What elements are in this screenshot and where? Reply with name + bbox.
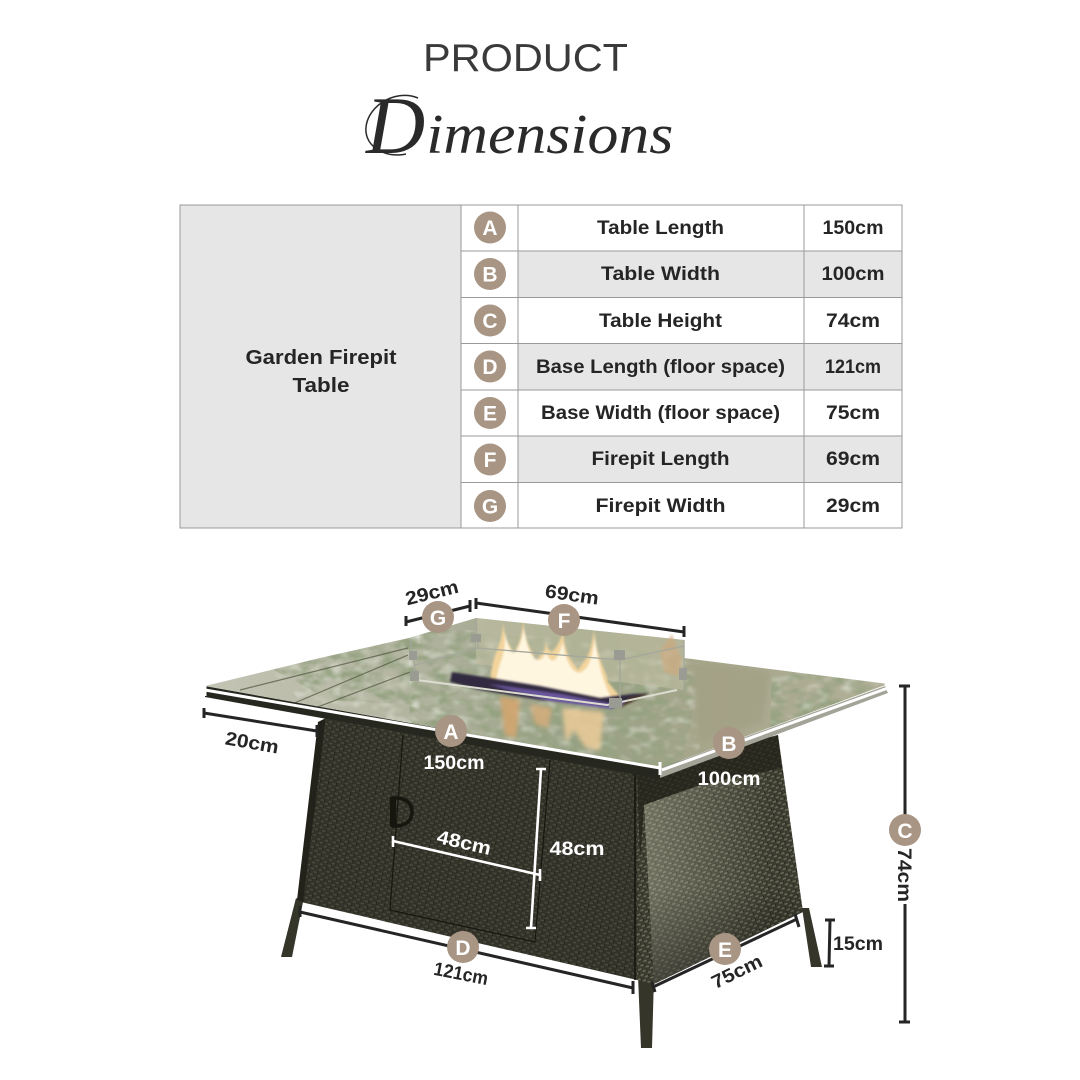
row B: table width [474,258,884,290]
row A: table length: A [482,217,498,240]
dimension: A table length 150cm: A [443,721,459,744]
row D: base length: 121cm [825,357,881,378]
table cell: product name: Table [292,375,350,397]
dimension: B table width 100cm: 100cm [698,769,760,790]
reflection of flames [500,696,604,750]
row C: table height: Table Height [599,311,723,332]
dimension: door height 48cm [526,769,604,928]
reflected foliage on glass [260,625,888,770]
table cell: product name: Garden Firepit [246,347,397,369]
row E: base width: Base Width (floor space) [541,403,780,424]
dimension: leg height 15cm: 15cm [833,934,883,955]
title line: Dimensions: Dimensions [365,80,673,171]
wicker base: side face [637,735,803,984]
row C: table height [474,304,880,336]
row B: table width: B [482,264,498,286]
row G: firepit width: 29cm [826,496,880,517]
glass panels [410,618,684,706]
dimension: G firepit width 29cm: G [430,607,446,630]
row D: base length: Base Length (floor space) [536,357,785,378]
dimension: D base length 121cm: 121cm [432,959,490,990]
row C: table height: 74cm [826,311,880,332]
glass table top [205,618,888,779]
dimension: overhang 20cm: 20cm [224,728,280,759]
row A: table length [474,212,884,244]
fire flames and glass screen [409,618,687,750]
dimension: A table length 150cm [205,685,660,775]
dimension: door width 48cm [393,827,540,881]
row F: firepit length [474,444,880,476]
row G: firepit width [474,490,880,522]
dimension: C table height 74cm: 74cm [893,848,914,902]
row F: firepit length: 69cm [826,449,880,470]
table legs [281,898,822,1048]
wicker base: front face [297,718,637,980]
dimension: D base length 121cm [300,906,633,994]
infographic canvas [180,44,921,1048]
dimension: D base length 121cm: D [455,937,471,960]
table cell: product name [180,205,461,528]
dimension: door width 48cm: 48cm [435,827,493,860]
row D: base length: D [482,356,498,379]
burner rocks [450,672,650,709]
row F: firepit length: F [484,449,497,472]
dimension: door height 48cm: 48cm [550,839,604,860]
row F: firepit length: Firepit Length [592,449,730,470]
row A: table length: Table Length [597,218,724,239]
row B: table width: Table Width [601,264,720,285]
dimension: C table height 74cm [889,686,921,1022]
row C: table height: C [482,310,498,333]
dimension: G firepit width 29cm [403,577,470,633]
dimension: leg height 15cm [824,920,883,966]
title line: PRODUCT: PRODUCT [423,37,628,80]
dimension: E base width 75cm: 75cm [708,951,766,994]
dimension: G firepit width 29cm: 29cm [403,577,461,610]
dimension: E base width 75cm: E [718,939,732,962]
row D: base length [474,350,881,382]
title [365,37,673,171]
dimension: A table length 150cm: 150cm [424,753,484,774]
dimension: E base width 75cm [652,914,799,994]
row G: firepit width: G [482,496,498,518]
row E: base width: E [483,402,497,426]
dimension: F firepit length 69cm: F [558,610,571,633]
row A: table length: 150cm [822,218,884,239]
row G: firepit width: Firepit Width [596,496,726,517]
dimension: B table width 100cm: B [721,733,737,756]
row E: base width [474,397,880,429]
dimension: B table width 100cm [662,681,889,790]
row E: base width: 75cm [826,403,880,424]
dimension: C table height 74cm: C [897,820,913,843]
dimension: F firepit length 69cm [476,581,684,637]
row B: table width: 100cm [822,264,884,285]
dimensions table [180,205,902,528]
dimension: overhang 20cm [204,708,317,759]
dimension: F firepit length 69cm: 69cm [544,581,600,610]
illustration: firepit table [205,618,888,1048]
flames [490,620,682,704]
